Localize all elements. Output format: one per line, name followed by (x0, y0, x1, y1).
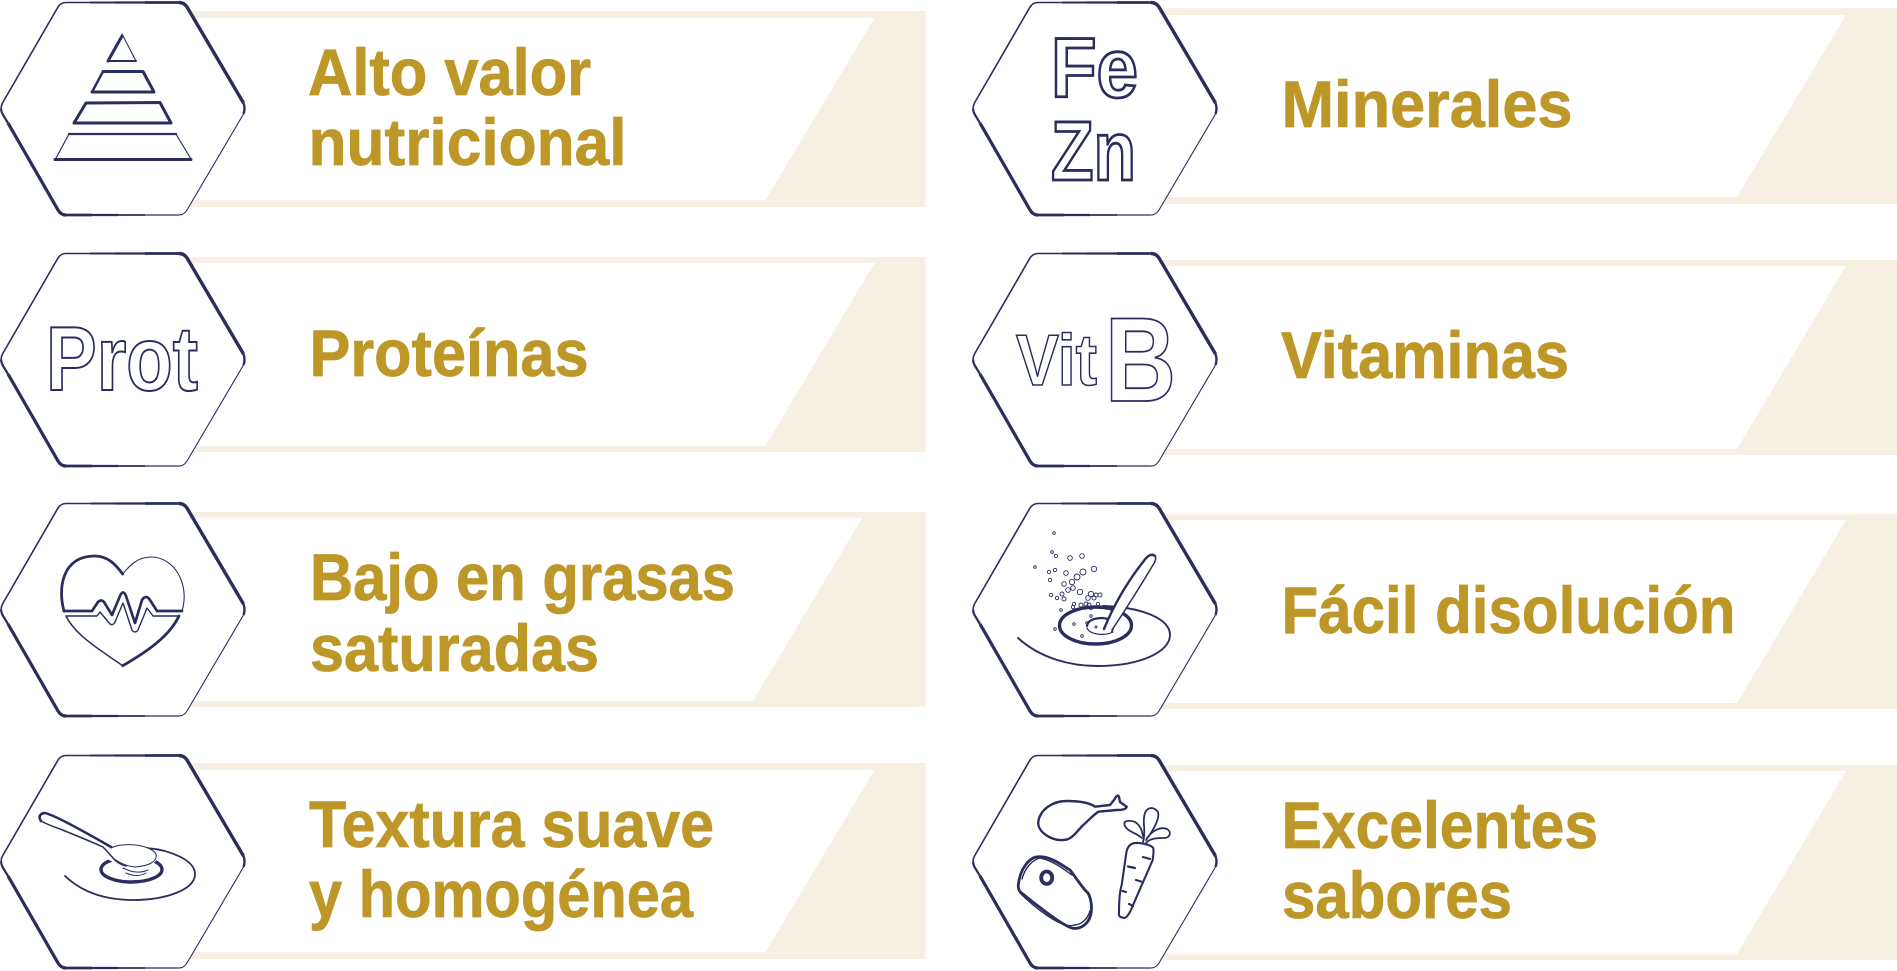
card: Proteínas (1, 254, 926, 466)
heading: saturadas (310, 611, 599, 685)
heading: Proteínas (310, 316, 588, 390)
heading (309, 787, 714, 931)
banner (1150, 8, 1897, 204)
banner (150, 257, 926, 452)
card: Vitaminas (973, 254, 1897, 466)
icon: Vit B outline text: Vit (1016, 321, 1097, 401)
card: Alto valor nutricional (1, 2, 926, 215)
heading (308, 35, 626, 179)
banner (1150, 260, 1897, 455)
hexagon (973, 254, 1217, 466)
heading: Vitaminas (1281, 318, 1569, 392)
icon: Fe Zn outline text: Fe (1051, 21, 1138, 115)
heading: Alto valor (308, 35, 591, 109)
heading: Fácil disolución (1282, 573, 1736, 647)
heading: Excelentes (1282, 788, 1598, 862)
hexagon (973, 504, 1217, 716)
icon: Prot outline text: Prot (46, 309, 198, 410)
banner (150, 11, 926, 207)
heading: Textura suave (309, 787, 714, 861)
hexagon (973, 2, 1217, 215)
icon: Fe Zn outline text: Zn (1051, 104, 1136, 198)
icon: drumstick, steak and carrot (1018, 796, 1170, 928)
hexagon (1, 504, 245, 716)
banner (1150, 765, 1897, 960)
heading: Minerales (1282, 67, 1572, 141)
hexagon (1, 2, 245, 215)
card: Minerales (973, 2, 1897, 215)
icon: powder dissolving with spoon (1018, 532, 1170, 666)
banner (150, 512, 926, 707)
card: Excelentes sabores (973, 756, 1897, 968)
heading: y homogénea (309, 857, 694, 931)
banner (150, 763, 926, 959)
card: Fácil disolución (973, 504, 1897, 716)
card: Bajo en grasas saturadas (1, 504, 926, 716)
heading (1282, 788, 1598, 932)
card: Textura suave y homogénea (1, 756, 926, 968)
hexagon (1, 254, 245, 466)
heading: sabores (1282, 858, 1512, 932)
hexagon (1, 756, 245, 968)
heading: Bajo en grasas (310, 540, 735, 614)
heading: nutricional (308, 105, 626, 179)
hexagon (973, 756, 1217, 968)
banner (1150, 514, 1897, 709)
icon: Vit B outline text: B (1105, 293, 1176, 427)
heading (310, 540, 735, 685)
icon: Vit B outline text (1016, 293, 1176, 427)
icon: Fe Zn outline text (1051, 21, 1138, 198)
icon: spoon on plate (40, 813, 195, 900)
icon: heart with pulse (62, 556, 184, 666)
icon: pyramid (55, 34, 191, 160)
